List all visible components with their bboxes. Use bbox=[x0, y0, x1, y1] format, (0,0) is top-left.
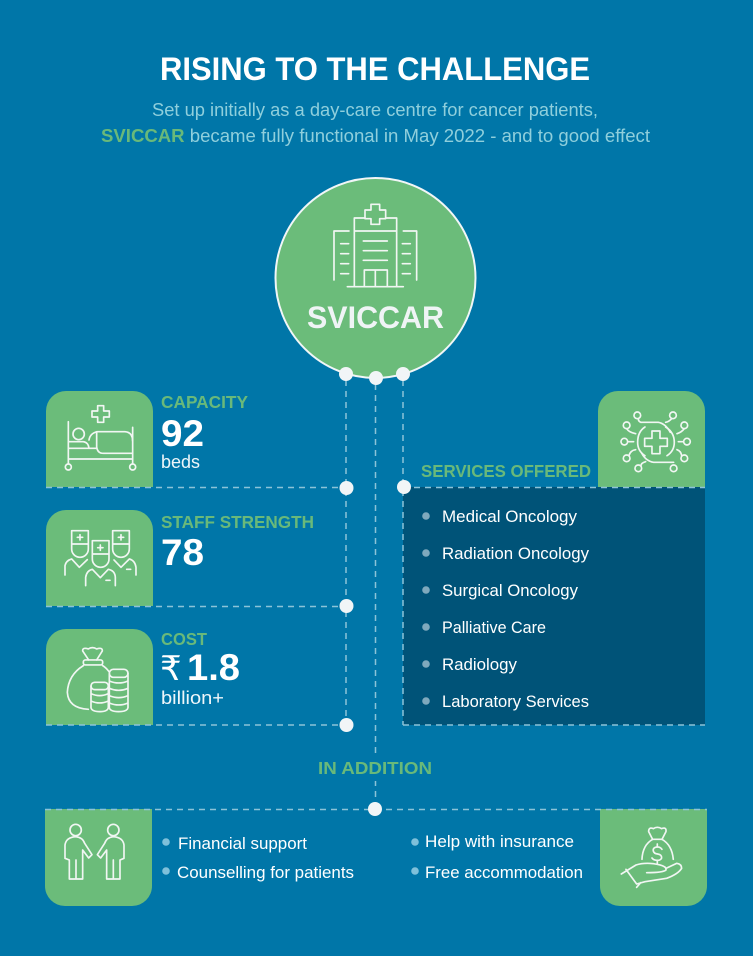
staff stat: 78 bbox=[161, 532, 204, 573]
icon: money bag in hand bbox=[621, 827, 682, 887]
icon: medical staff bbox=[65, 531, 136, 586]
circle label: SVICCAR bbox=[307, 299, 444, 335]
icon: money bag and coins bbox=[67, 648, 128, 712]
green tile: services bbox=[598, 391, 705, 487]
subtitle: SVICCAR became fully functional in May 2022 - and to good effect bbox=[101, 126, 650, 146]
capacity stat bbox=[161, 392, 248, 472]
subtitle bbox=[101, 100, 650, 146]
services list bbox=[422, 508, 590, 711]
connector dots bbox=[339, 367, 411, 816]
additional support list right: Free accommodation bbox=[425, 864, 583, 882]
additional support list left: Financial support bbox=[178, 835, 307, 853]
cost stat bbox=[160, 629, 240, 708]
services heading: SERVICES OFFERED bbox=[421, 461, 591, 481]
capacity stat: 92 bbox=[161, 413, 204, 454]
icon: medical network bbox=[621, 412, 690, 472]
services list: Radiology bbox=[442, 656, 518, 674]
green tile: staff bbox=[46, 510, 153, 606]
services list: Medical Oncology bbox=[442, 508, 578, 526]
icon: hospital bed bbox=[65, 406, 136, 470]
green tile: capacity bbox=[46, 391, 153, 487]
green tile: money in hand bbox=[600, 809, 707, 906]
icon: hospital bbox=[334, 204, 417, 287]
additional support list left bbox=[162, 835, 354, 882]
in addition heading: IN ADDITION bbox=[318, 758, 432, 778]
dark services panel bbox=[403, 487, 705, 725]
cost stat: ₹ bbox=[160, 650, 182, 688]
services list: Palliative Care bbox=[442, 619, 546, 637]
cost stat: COST bbox=[161, 629, 207, 649]
green tile: people bbox=[45, 809, 152, 906]
staff stat bbox=[161, 512, 314, 573]
services list: Laboratory Services bbox=[442, 693, 589, 711]
staff stat: STAFF STRENGTH bbox=[161, 512, 314, 532]
green tile: cost bbox=[46, 629, 153, 725]
central circle bbox=[276, 178, 476, 378]
additional support list right bbox=[411, 833, 583, 882]
title: RISING TO THE CHALLENGE bbox=[160, 51, 590, 87]
additional support list left: Counselling for patients bbox=[177, 864, 354, 882]
services list: Radiation Oncology bbox=[442, 545, 590, 563]
services list: Surgical Oncology bbox=[442, 582, 579, 600]
additional support list right: Help with insurance bbox=[425, 833, 574, 851]
in addition heading bbox=[312, 755, 438, 781]
capacity stat: beds bbox=[161, 452, 200, 472]
cost stat: billion+ bbox=[161, 688, 224, 708]
capacity stat: CAPACITY bbox=[161, 392, 248, 412]
icon: two people bbox=[65, 824, 124, 879]
dashed connector lines bbox=[45, 380, 707, 810]
cost stat: 1.8 bbox=[187, 647, 240, 688]
subtitle: Set up initially as a day-care centre for cancer patients, bbox=[152, 100, 598, 120]
